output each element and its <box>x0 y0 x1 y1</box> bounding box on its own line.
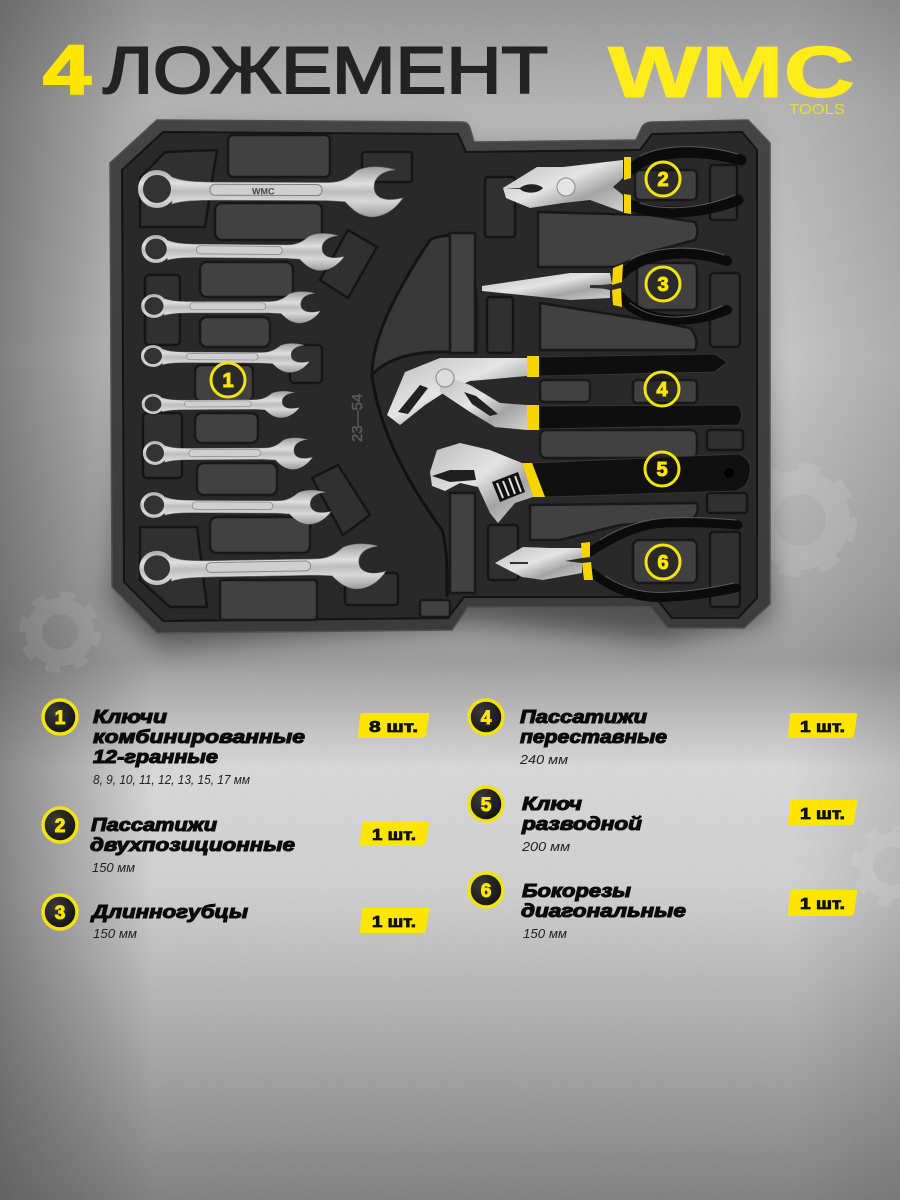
legend item 4 <box>469 700 667 767</box>
legend item 5: 5 <box>481 795 492 816</box>
badge: 1 pc: 1 шт. <box>372 914 416 931</box>
badge: 1 pc <box>360 821 429 845</box>
legend item 2: 150 мм <box>92 861 135 875</box>
logo: WMC Tools: WMC <box>608 33 855 113</box>
logo: WMC Tools: TOOLS <box>789 101 845 118</box>
legend item 6 <box>469 873 686 941</box>
tray centre raised section <box>349 234 476 597</box>
callout 1 <box>211 363 245 397</box>
legend item 5: 200 мм <box>521 840 570 854</box>
callout 4 <box>645 372 679 406</box>
legend item 4: Пассатижи <box>520 706 647 727</box>
legend item 1: комбинированные <box>93 726 305 747</box>
legend item 4: 4 <box>481 708 492 729</box>
wrench 13 mm <box>143 292 320 323</box>
wrench 12 mm <box>142 343 310 373</box>
badge: 8 pcs: 8 шт. <box>369 719 418 736</box>
callout 1: 1 <box>222 370 234 392</box>
legend item 6: Бокорезы <box>522 880 631 901</box>
callout 5: 5 <box>656 459 668 481</box>
callout 3 <box>646 267 680 301</box>
callout 5 <box>645 452 679 486</box>
tool: diagonal cutters <box>495 518 738 598</box>
legend item 6: 150 мм <box>523 927 567 941</box>
wrench 17 mm <box>140 166 403 217</box>
legend item 3: Длинногубцы <box>90 901 248 922</box>
legend item 3 <box>43 895 248 941</box>
icon: background gear left <box>24 596 96 668</box>
legend item 5 <box>469 787 642 854</box>
badge: 1 pc <box>788 800 857 825</box>
badge: 1 pc <box>788 890 857 916</box>
callout 2 <box>646 162 680 196</box>
callout 6: 6 <box>657 552 669 574</box>
title: 4 <box>43 31 91 109</box>
tool: adjustable-joint pliers <box>387 354 742 430</box>
legend item 5: разводной <box>521 813 642 834</box>
badge: 1 pc: 1 шт. <box>372 827 416 844</box>
legend item 1: 12-гранные <box>93 746 218 767</box>
wrench 15 mm <box>143 232 344 271</box>
title: ЛОЖЕМЕНТ <box>103 33 548 107</box>
legend item 2 <box>43 808 295 875</box>
badge: 1 pc: 1 шт. <box>800 719 845 736</box>
wrench 10 mm <box>144 438 313 470</box>
legend item 1 <box>43 700 305 787</box>
wrench 9 mm <box>142 489 331 524</box>
icon: background gear lower right <box>856 830 900 902</box>
legend item 1: Ключи <box>93 706 167 727</box>
legend item 5: Ключ <box>522 793 582 814</box>
tool: two-position pliers <box>503 147 741 214</box>
callout 3: 3 <box>657 274 669 296</box>
badge: 1 pc: 1 шт. <box>800 896 845 913</box>
icon: background gear right <box>750 470 850 570</box>
legend item 6: 6 <box>481 881 491 902</box>
legend item 2: 2 <box>55 816 65 837</box>
badge: 1 pc <box>788 713 857 738</box>
legend item 1: 8, 9, 10, 11, 12, 13, 15, 17 мм <box>93 773 250 787</box>
badge: 1 pc <box>360 908 429 933</box>
tool: adjustable wrench <box>430 443 750 523</box>
tray centre raised section: 23—54 <box>349 394 366 442</box>
legend item 3: 150 мм <box>93 927 137 941</box>
legend item 6: диагональные <box>521 900 686 921</box>
callout 4: 4 <box>656 379 668 401</box>
legend item 4: переставные <box>520 726 667 747</box>
tray recesses left <box>140 135 450 620</box>
legend item 4: 240 мм <box>519 753 568 767</box>
panel: tool tray <box>110 120 770 648</box>
badge: 1 pc: 1 шт. <box>800 806 845 823</box>
badge: 8 pcs <box>358 713 429 738</box>
logo: WMC Tools <box>608 33 855 118</box>
callout 2: 2 <box>657 169 669 191</box>
wrench 17 mm: WMC <box>252 186 275 196</box>
tray recesses right <box>450 165 747 607</box>
tool: long-nose pliers <box>482 248 727 320</box>
legend item 2: Пассатижи <box>91 814 217 835</box>
legend item 2: двухпозиционные <box>90 834 295 855</box>
legend item 3: 3 <box>55 903 65 924</box>
wrench 11 mm <box>143 391 299 418</box>
wrench 8 mm <box>141 543 386 593</box>
legend item 1: 1 <box>55 708 66 729</box>
callout 6 <box>646 545 680 579</box>
